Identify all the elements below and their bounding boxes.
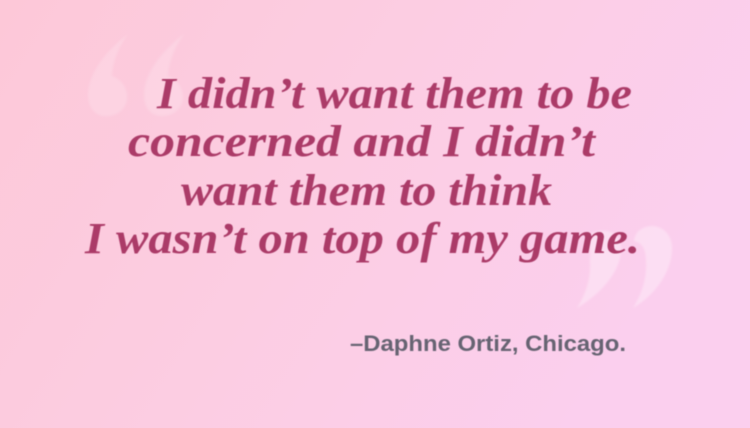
quote text: I didn’t want them to be — [156, 69, 632, 118]
quote text — [84, 69, 640, 263]
quote text: want them to think — [181, 166, 552, 215]
quote text: concerned and I didn’t — [128, 117, 597, 166]
quote text: I wasn’t on top of my game. — [84, 214, 640, 263]
attribution: –Daphne Ortiz, Chicago. — [350, 331, 626, 356]
icon: opening quotation mark — [88, 34, 184, 116]
icon: closing quotation mark — [577, 226, 672, 308]
